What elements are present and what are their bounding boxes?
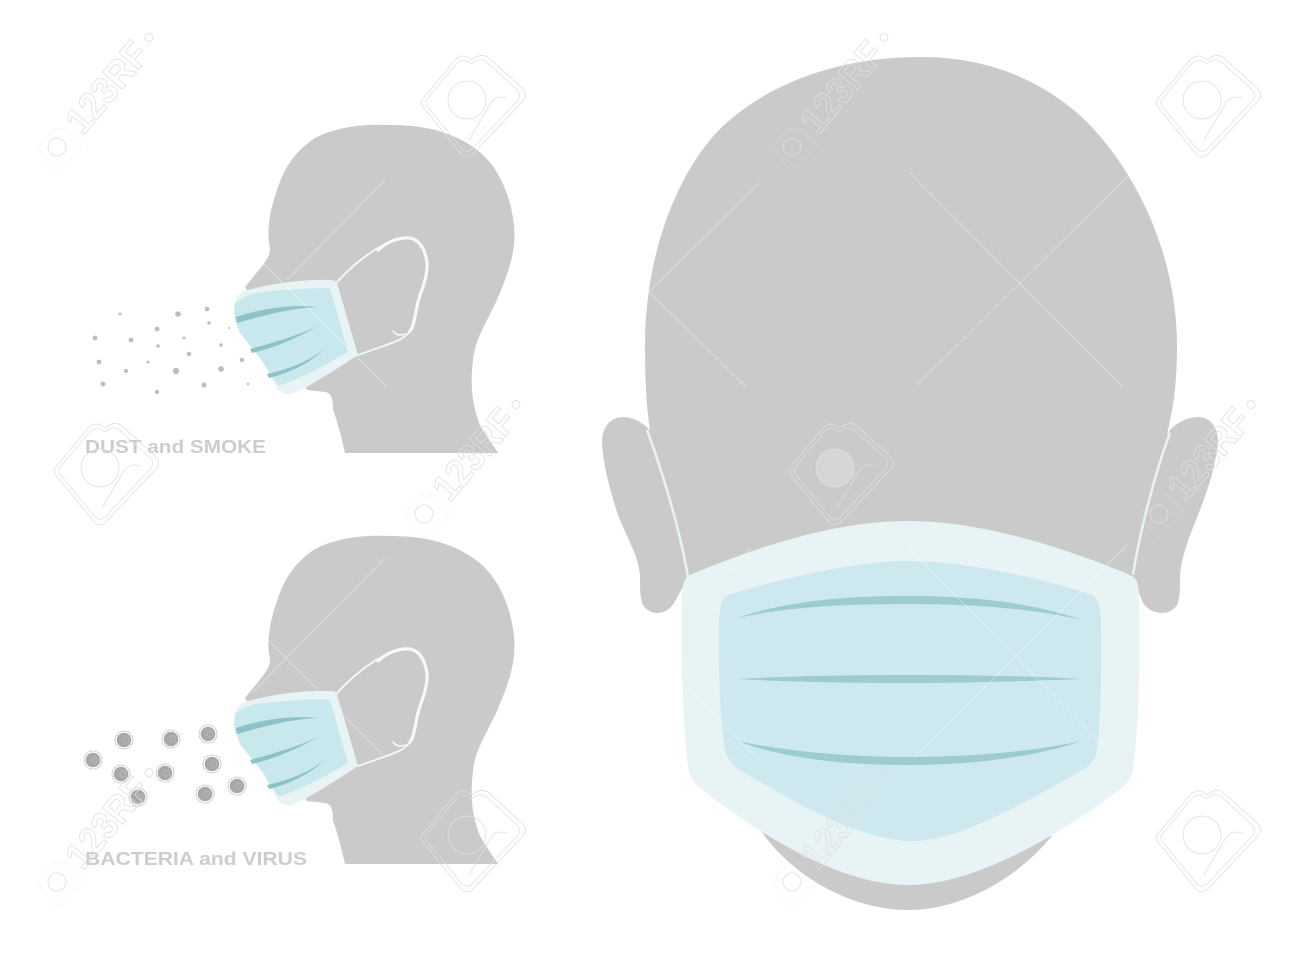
watermark: logo middle right: 123RF — [1160, 401, 1260, 509]
label: bacteria and virus: BACTERIA and VIRUS — [85, 848, 307, 869]
watermark: logo bottom left — [38, 757, 168, 906]
icon: right ear — [1130, 417, 1218, 613]
icon: head profile — [245, 536, 514, 864]
icon: ear strap — [337, 238, 427, 355]
watermark: logo top centre — [773, 22, 903, 171]
watermark: logo top centre: 123RF — [793, 34, 893, 142]
watermark: diagonal lines — [252, 172, 1132, 763]
icon: side mask — [234, 280, 358, 394]
label: dust and smoke: DUST and SMOKE — [85, 436, 266, 457]
watermark: logo middle right — [1140, 389, 1270, 538]
icon: virus particles — [84, 725, 246, 806]
watermark: logo middle centre-left: 123RF — [425, 401, 525, 509]
watermark: logo top left: 123RF — [58, 34, 158, 142]
icon: front mask — [681, 521, 1139, 885]
watermark: logo top left — [38, 22, 168, 171]
icon: left ear — [602, 417, 690, 613]
panel: bacteria and virus profile — [84, 536, 514, 869]
watermark: logo bottom centre — [773, 757, 903, 906]
watermark: logo bottom centre: 123RF — [793, 769, 893, 877]
icon: side mask — [234, 691, 358, 805]
icon: dust particles — [93, 307, 249, 394]
watermark: logo middle centre-left — [405, 389, 535, 538]
icon: ear strap — [337, 649, 427, 766]
mask pleats — [737, 596, 1082, 765]
icon: ear straps — [647, 430, 1170, 577]
panel: dust and smoke profile — [85, 125, 514, 457]
icon: head profile — [245, 125, 514, 453]
panel: front view — [602, 57, 1218, 910]
watermark: logo bottom left: 123RF — [58, 769, 158, 877]
icon: head front — [645, 57, 1177, 910]
watermark: stamps — [54, 55, 1261, 892]
